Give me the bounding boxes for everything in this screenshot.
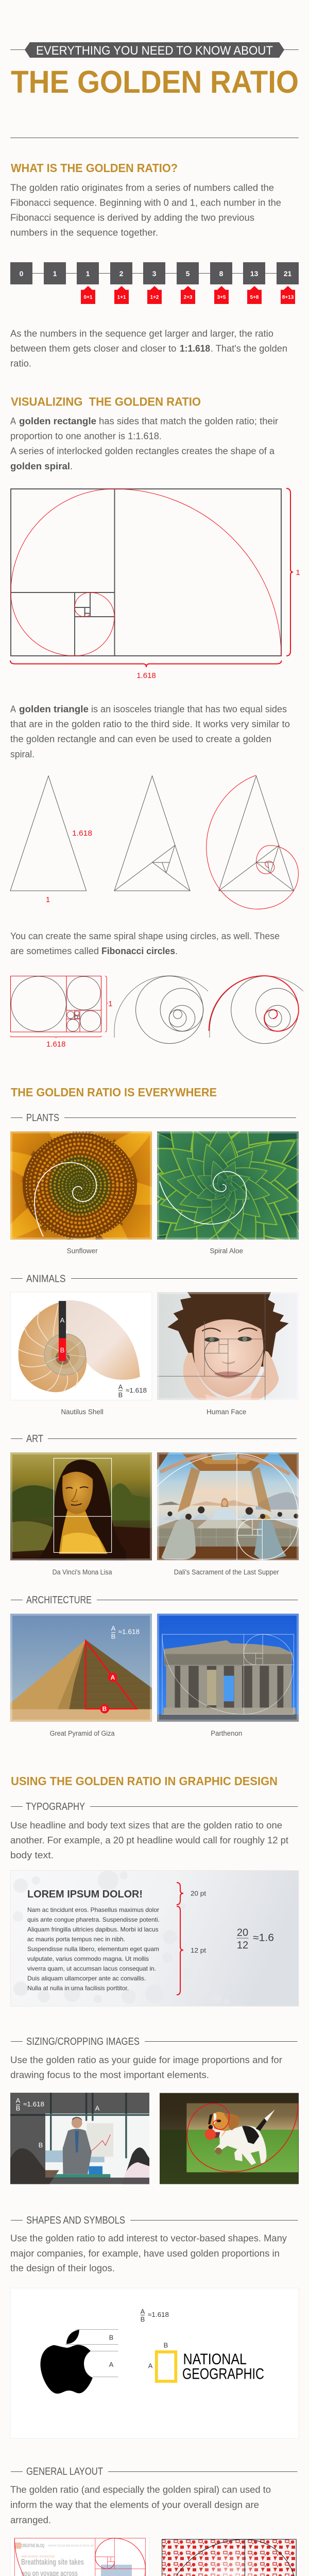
fibonacci rectangle with circles	[10, 976, 112, 1049]
crop overlay	[10, 2093, 149, 2184]
heading: THE GOLDEN RATIO IS EVERYWHERE	[11, 1086, 217, 1099]
fibonacci sequence diagram: 0+1	[84, 295, 93, 300]
golden triangle	[10, 776, 92, 904]
golden triangle text: A	[10, 704, 16, 714]
subdivided golden triangle	[114, 776, 190, 891]
ratio explanation text	[10, 328, 287, 369]
golden triangle text: that are in the golden ratio to the third side. It works very similar to	[10, 719, 290, 730]
section: using the golden ratio in graphic design	[10, 1774, 299, 2576]
icon: national geographic logo: B	[164, 2342, 168, 2349]
sample body text: Nam ac tincidunt eros. Phasellus maximus dolor	[27, 1906, 159, 1913]
captions: architecture: Parthenon	[211, 1730, 242, 1737]
subheading: typography: TYPOGRAPHY	[26, 1801, 85, 1812]
ratio formula: B	[118, 1391, 123, 1399]
ratio formula: A	[141, 2308, 145, 2315]
golden triangle text: is an isosceles triangle that has two equal sides	[91, 704, 287, 714]
A/B measure bar	[59, 1301, 66, 1361]
red spiral	[187, 2103, 298, 2172]
fibonacci circles text: Fibonacci circles	[101, 945, 175, 956]
intro text: numbers in the sequence together.	[10, 227, 158, 238]
dog body	[215, 2126, 266, 2165]
fibonacci sequence diagram: 1+1	[117, 295, 126, 300]
heading: VISUALIZING THE GOLDEN RATIO	[11, 395, 201, 408]
width and height braces: 1	[296, 568, 300, 577]
sizing text	[10, 2055, 282, 2080]
figure: web layout: CREATIVE BLOQ	[21, 2543, 44, 2548]
ribbon banner: EVERYTHING YOU NEED TO KNOW ABOUT	[36, 44, 273, 58]
photo: beagle with red ball crop	[160, 2093, 299, 2184]
fibonacci sequence diagram	[10, 262, 299, 304]
ratio formula: 20	[237, 1927, 248, 1939]
golden triangle text: golden triangle	[19, 704, 89, 714]
captions: animals: Nautilus Shell	[61, 1408, 104, 1416]
ratio formula: A	[111, 1624, 116, 1632]
icon: national geographic logo: A	[148, 2362, 153, 2370]
shapes text: major companies, for example, have used golden proportions in	[10, 2248, 280, 2259]
photo: great pyramid of giza: A	[111, 1674, 115, 1681]
presenter	[63, 2129, 92, 2174]
typography text: body text.	[10, 1850, 54, 1860]
fibonacci sequence diagram: 3+5	[217, 295, 226, 300]
ratio formula	[237, 1927, 274, 1951]
golden rectangle lines	[54, 1458, 112, 1552]
golden triangle: 1	[46, 895, 50, 904]
heading: USING THE GOLDEN RATIO IN GRAPHIC DESIGN	[11, 1774, 278, 1788]
ratio formula: 12	[237, 1940, 248, 1951]
figure: web layout: Breathtaking site takes	[21, 2558, 84, 2567]
panel: typography example: 20 pt	[191, 1890, 206, 1897]
fibonacci sequence diagram: 1	[86, 269, 90, 278]
photo: spiral aloe	[157, 1131, 299, 1240]
captions: architecture: Great Pyramid of Giza	[50, 1730, 115, 1737]
heading: WHAT IS THE GOLDEN RATIO?	[11, 161, 178, 175]
fibonacci circles with red spiral	[209, 976, 303, 1044]
distant hills	[256, 1492, 299, 1510]
arms	[161, 1455, 206, 1471]
ratio formula: B	[141, 2315, 145, 2323]
audience	[122, 2147, 149, 2184]
neck and chest	[59, 1509, 108, 1554]
photo: dali's sacrament of the last supper	[157, 1452, 299, 1560]
hair	[38, 1460, 126, 1561]
fibonacci sequence diagram: 0	[20, 269, 24, 278]
icon: national geographic logo: GEOGRAPHIC	[182, 2366, 264, 2383]
ratio formula	[111, 1624, 140, 1640]
ratio formula: ≈1.618	[23, 2100, 44, 2108]
spiral overlay	[160, 1172, 246, 1224]
captions: animals: Human Face	[207, 1408, 246, 1416]
ratio formula: A	[16, 2096, 21, 2104]
sample body text	[27, 1906, 160, 1992]
fibonacci circles text: .	[175, 945, 178, 956]
layout text: The golden ratio (and especially the golden spiral) can used to	[10, 2484, 271, 2495]
section: what is the golden ratio	[10, 161, 299, 369]
ratio formula	[141, 2308, 169, 2323]
fibonacci circles text: You can create the same spiral shape using circles, as well. These	[10, 930, 280, 941]
photo: great pyramid of giza: B	[102, 1705, 107, 1713]
fibonacci sequence diagram: 8	[219, 269, 224, 278]
photo: da vinci's mona lisa	[10, 1452, 152, 1561]
ratio explanation text: . That's the golden	[211, 343, 287, 354]
intro text: The golden ratio originates from a series of numbers called the	[10, 182, 274, 193]
sample body text: Nulla at nulla in urna facilisis porttitor.	[27, 1985, 129, 1992]
sample body text: Aliquam fringilla ultricies dapibus. Morbi id lacus	[27, 1926, 159, 1933]
intro text: Fibonacci sequence is derived by adding the two previous	[10, 212, 254, 223]
golden rectangle text	[10, 415, 278, 471]
sizing text: drawing focus to the most important elements.	[10, 2070, 209, 2080]
fibonacci rectangle with circles: 1.618	[46, 1040, 65, 1049]
shapes text	[10, 2233, 287, 2274]
golden triangle with spiral	[207, 775, 298, 909]
intro text: Fibonacci sequence. Beginning with 0 and 1, each number in the	[10, 197, 281, 208]
photo: great pyramid of giza	[10, 1614, 152, 1722]
hands	[183, 1353, 218, 1400]
captions: plants: Sunflower	[67, 1247, 98, 1255]
black golden grid and spiral	[162, 2539, 296, 2576]
ratio formula	[118, 1383, 147, 1399]
icon: apple logo	[40, 2330, 118, 2394]
photo: human face	[157, 1292, 299, 1400]
golden grid	[157, 1294, 265, 1400]
golden spiral overlay	[157, 1452, 299, 1560]
icon: apple logo: B	[109, 2334, 113, 2342]
fibonacci circles text: are sometimes called	[10, 945, 99, 956]
subheading: plants: PLANTS	[26, 1112, 59, 1124]
shapes text: Use the golden ratio to add interest to vector-based shapes. Many	[10, 2233, 287, 2243]
golden rectangle diagram	[10, 488, 300, 680]
ratio formula: A	[118, 1383, 123, 1391]
sample body text: Suspendisse nulla libero, elementum eget quam	[27, 1945, 159, 1953]
typography text: Use headline and body text sizes that are the golden ratio to one	[10, 1820, 282, 1831]
width and height braces	[10, 488, 300, 680]
golden rectangle text: A	[10, 415, 16, 427]
fibonacci sequence diagram: 1	[53, 269, 57, 278]
subheading: shapes and symbols: SHAPES AND SYMBOLS	[26, 2215, 125, 2226]
sizing text: Use the golden ratio as your guide for image proportions and for	[10, 2055, 282, 2065]
subheading: general layout: GENERAL LAYOUT	[26, 2466, 103, 2478]
table figures	[163, 1506, 286, 1520]
fibonacci circles	[114, 976, 208, 1044]
wooden frame	[182, 1453, 269, 1471]
subheading: art: ART	[26, 1433, 43, 1445]
figure: web layout	[10, 2538, 149, 2576]
dog head	[208, 2112, 229, 2138]
photo: nautilus shell: B	[60, 1346, 64, 1354]
subheading: animals: ANIMALS	[26, 1273, 66, 1284]
fibonacci sequence diagram: 5	[186, 269, 190, 278]
captions: plants	[67, 1247, 243, 1255]
ratio formula: ≈1.6	[253, 1933, 274, 1944]
golden rectangle text: proportion to one another is 1:1.618.	[10, 431, 162, 442]
photo: business presentation crop: A	[95, 2105, 100, 2112]
golden triangle text: spiral.	[10, 749, 35, 759]
central window sky	[190, 1471, 259, 1506]
photo: nautilus shell: A	[60, 1316, 65, 1324]
sample body text: viverra quam, ut accumsan lacus consequat in.	[27, 1965, 156, 1972]
sample body text: Duis aliquam ullamcorper ante ac convallis.	[27, 1975, 146, 1982]
figure: web layout: WEB DESIGN | SHOWCASE	[21, 2555, 55, 2558]
captions: architecture	[50, 1730, 242, 1737]
golden triangle text	[10, 704, 290, 759]
shapes text: the design of their logos.	[10, 2263, 115, 2274]
typography text	[10, 1820, 288, 1860]
ratio formula: ≈1.618	[118, 1628, 140, 1635]
ratio formula: ≈1.618	[148, 2311, 169, 2318]
layout text: inform the way that the elements of your overall design are	[10, 2499, 259, 2510]
fibonacci sequence diagram: 3	[152, 269, 157, 278]
width and height braces: 1.618	[136, 671, 156, 680]
red golden grid	[14, 2538, 145, 2576]
sample body text: quis ante congue pharetra. Suspendisse potenti.	[27, 1916, 160, 1923]
icon: apple logo: A	[109, 2361, 114, 2368]
subheading: architecture: ARCHITECTURE	[26, 1595, 92, 1606]
panel: typography example: 12 pt	[191, 1946, 206, 1954]
panel: logos	[10, 2288, 299, 2438]
header	[10, 42, 299, 99]
subheading: sizing/cropping images: SIZING/CROPPING IMAGES	[26, 2036, 140, 2047]
golden rectangle text: golden rectangle	[19, 415, 96, 427]
golden rectangle text: has sides that match the golden ratio; their	[99, 415, 278, 427]
fibonacci sequence diagram: 5+8	[250, 295, 259, 300]
fibonacci rectangle with circles: 1	[108, 999, 112, 1008]
golden rectangle text: golden spiral	[10, 461, 70, 471]
fibonacci sequence diagram: 2	[119, 269, 124, 278]
ratio explanation text: 1:1.618	[180, 343, 210, 354]
spiral overlay	[35, 1162, 96, 1236]
photo: business presentation crop: B	[39, 2141, 43, 2149]
face	[194, 1319, 263, 1397]
figure: web layout: GRAPHIC DESIGN WEB DESIGN 3D DIGITAL ART	[48, 2545, 94, 2548]
hair	[167, 1292, 289, 1367]
ratio formula: B	[16, 2104, 20, 2112]
golden triangle text: the golden rectangle and can even be used to create a golden	[10, 734, 271, 744]
captions: art	[53, 1568, 279, 1576]
crop overlay	[160, 2093, 299, 2184]
golden triangle: 1.618	[72, 829, 92, 838]
golden spiral overlay	[162, 1634, 294, 1715]
fibonacci circles text	[10, 930, 280, 956]
icon: national geographic logo	[148, 2342, 264, 2383]
ratio formula: B	[111, 1633, 115, 1640]
intro text	[10, 182, 281, 238]
figure: print layout	[160, 2537, 299, 2576]
fibonacci sequence diagram: 13	[250, 269, 258, 278]
captions: art: Dali's Sacrament of the Last Supper	[174, 1568, 279, 1576]
fibonacci sequence diagram: 1+2	[150, 295, 159, 300]
captions: animals	[61, 1408, 246, 1416]
ratio explanation text: As the numbers in the sequence get larger and larger, the ratio	[10, 328, 273, 339]
photo: business presentation crop	[10, 2093, 149, 2184]
photo: sunflower	[10, 1131, 152, 1240]
golden spiral	[11, 489, 281, 656]
panel: typography example	[10, 1870, 299, 2006]
table and stone wall	[157, 1520, 299, 1529]
photo: nautilus shell	[10, 1292, 152, 1400]
photo: parthenon	[157, 1614, 299, 1722]
captions: art: Da Vinci's Mona Lisa	[53, 1568, 112, 1576]
captions: plants: Spiral Aloe	[210, 1247, 243, 1255]
sample headline: LOREM IPSUM DOLOR!	[27, 1889, 143, 1900]
red triangle	[85, 1641, 136, 1709]
fibonacci sequence diagram: 21	[284, 269, 291, 278]
icon: national geographic logo: NATIONAL	[183, 2351, 247, 2368]
ratio formula	[16, 2096, 44, 2112]
golden rectangle text: A series of interlocked golden rectangles creates the shape of a	[10, 446, 275, 456]
golden rectangle text: .	[70, 461, 73, 471]
typography text: another. For example, a 20 pt headline would call for roughly 12 pt	[10, 1835, 288, 1845]
ratio formula: ≈1.618	[126, 1386, 147, 1394]
layout text	[10, 2484, 271, 2525]
ratio explanation text: ratio.	[10, 358, 31, 369]
section: the golden ratio is everywhere	[0, 1085, 309, 1737]
section: visualizing the golden ratio	[10, 395, 303, 1049]
layout text: arranged.	[10, 2514, 51, 2525]
sample body text: ac mauris porta tempus nec in nibh.	[27, 1936, 125, 1943]
fibonacci sequence diagram: 2+3	[184, 295, 193, 300]
sample body text: vulputate, varius commodo magna. Ut mollis	[27, 1955, 149, 1962]
ratio explanation text: between them gets closer and closer to	[10, 343, 177, 354]
size braces	[177, 1883, 183, 1995]
fibonacci sequence diagram: 8+13	[282, 295, 294, 300]
robed figures	[161, 1518, 196, 1560]
